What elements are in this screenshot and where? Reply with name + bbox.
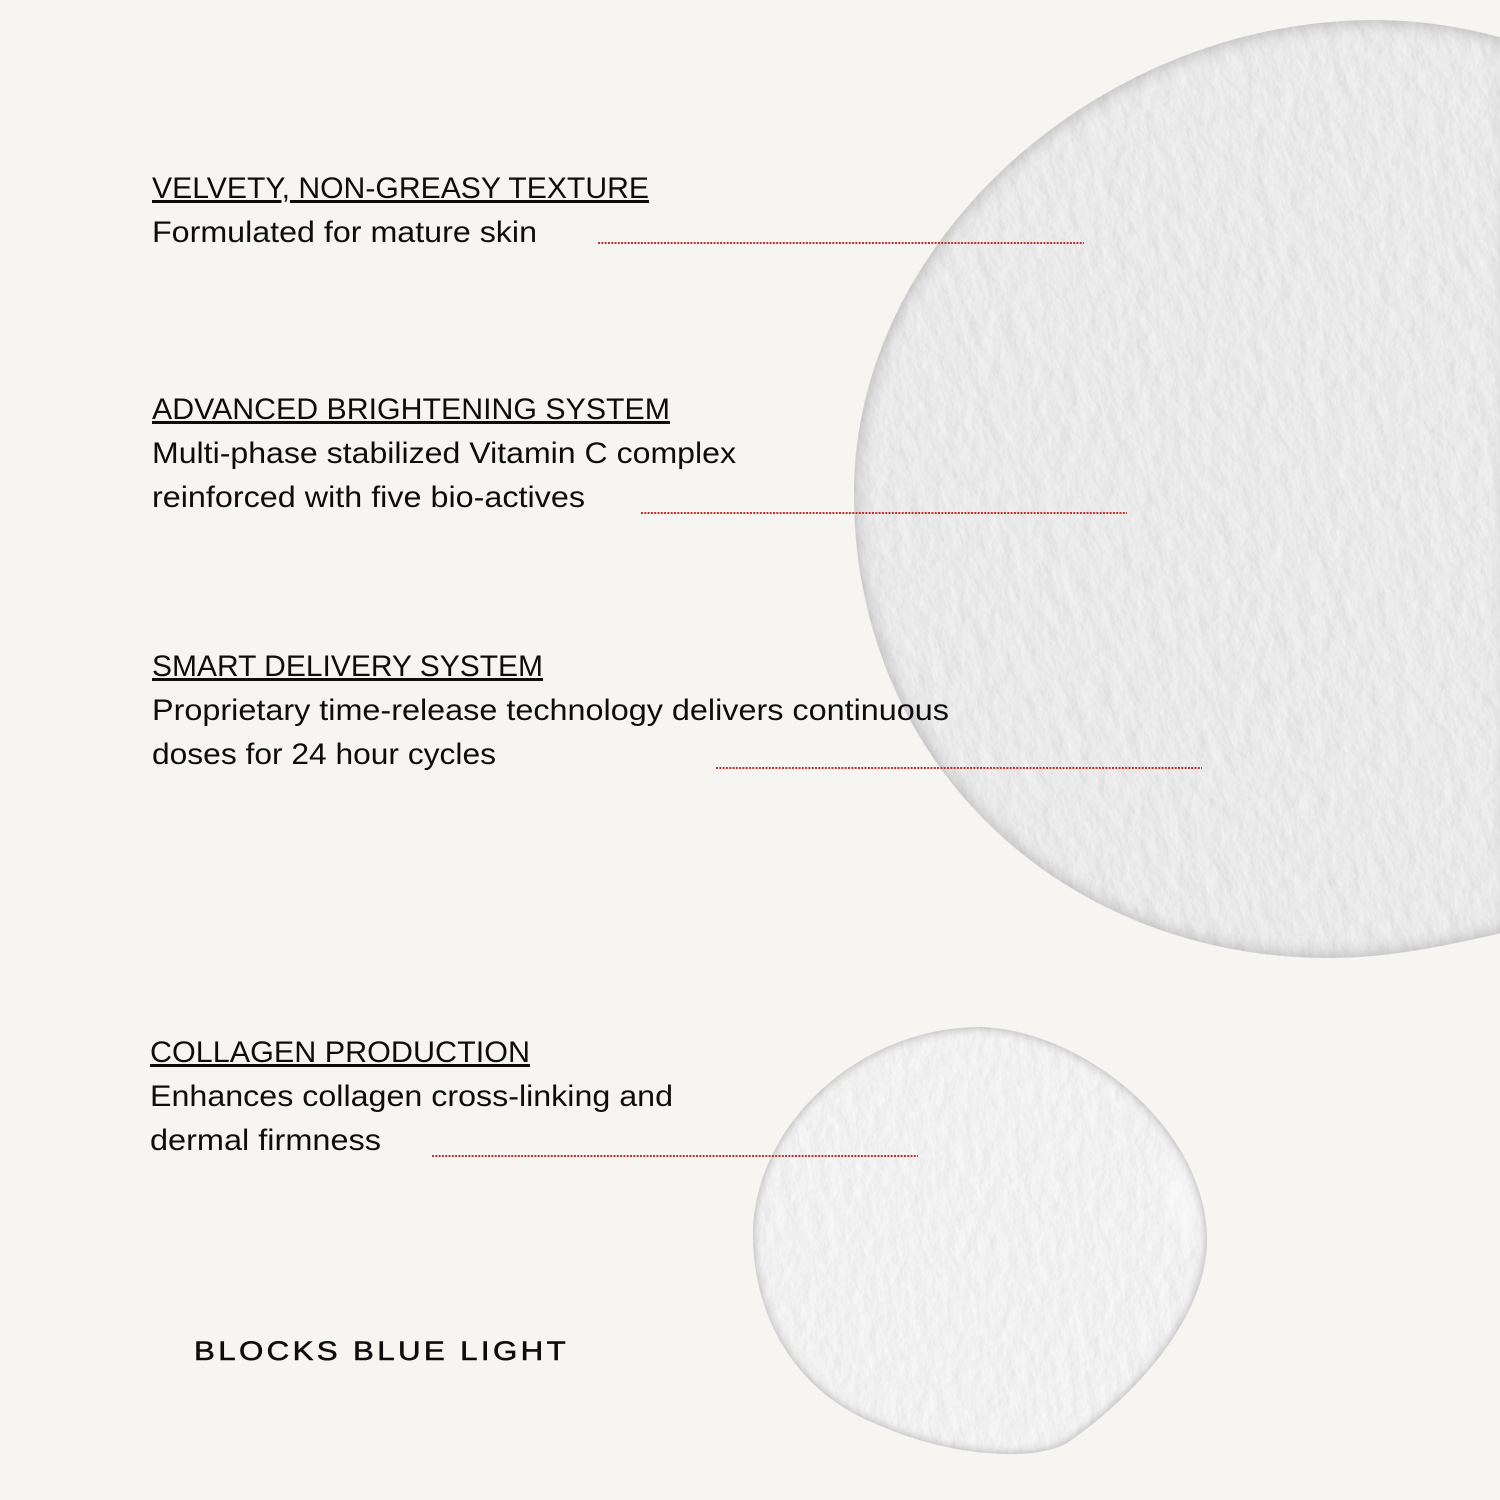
small cream swatch [680,949,1280,1500]
callout: collagen production: COLLAGEN PRODUCTION [150,1036,530,1069]
callout: velvety texture [152,172,1084,249]
callout: brightening system [152,393,1127,514]
callout: smart delivery: doses for 24 hour cycles [152,738,496,771]
callout: velvety texture: Formulated for mature skin [152,216,537,249]
callout: collagen production: dermal firmness [150,1124,381,1157]
label: blocks blue light: BLOCKS BLUE LIGHT [194,1337,566,1366]
callout: smart delivery [152,650,1202,771]
callout: smart delivery: SMART DELIVERY SYSTEM [152,650,543,683]
callout: brightening system: ADVANCED BRIGHTENING SYSTEM [152,393,670,426]
callout: collagen production [150,1036,918,1157]
callout: collagen production: Enhances collagen cross-linking and [150,1080,673,1113]
callout: brightening system: reinforced with five bio-actives [152,481,585,514]
large cream swatch [553,0,1500,1169]
callout: brightening system: Multi-phase stabilized Vitamin C complex [152,437,736,470]
callout: smart delivery: Proprietary time-release technology delivers continuous [152,694,949,727]
callout: velvety texture: VELVETY, NON-GREASY TEXTURE [152,172,649,205]
